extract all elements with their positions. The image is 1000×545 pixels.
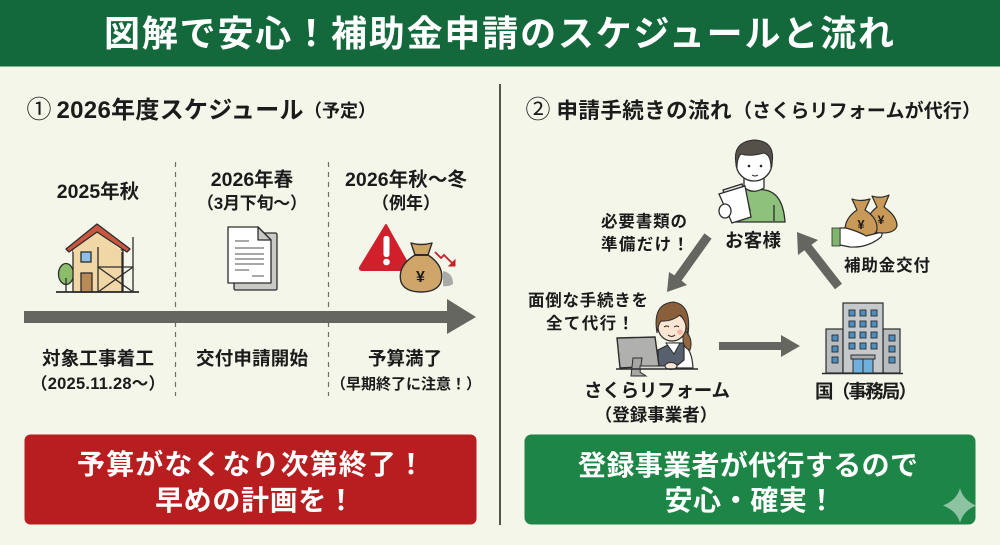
column 2: 2026 spring: 2026年春 <box>211 168 294 191</box>
column 3: 2026 autumn-winter: （例年） <box>372 193 440 213</box>
timeline arrow <box>24 299 476 334</box>
label: Sakura Reform: （登録事業者） <box>595 405 717 425</box>
arrow: customer to reform company <box>667 233 712 292</box>
column 1: 2025 autumn: 対象工事着工 <box>42 348 154 369</box>
icon: subsidy money bags in hand: ¥ <box>878 213 885 227</box>
callout: registered business handles it <box>524 434 976 524</box>
icon: government building <box>822 303 903 374</box>
icon: customer with papers <box>719 140 785 223</box>
heading: schedule: 2026年度スケジュール <box>56 97 304 124</box>
callout: budget warning <box>24 434 476 524</box>
label: just prepare documents: 準備だけ！ <box>601 234 689 254</box>
title banner <box>0 0 1000 66</box>
arrow: government to customer <box>797 232 842 289</box>
panel: 2026 schedule <box>24 96 481 524</box>
arrow: reform company to government <box>719 335 800 357</box>
column 3: 2026 autumn-winter: 予算満了 <box>368 348 442 369</box>
icon: warning and money bag: ¥ <box>416 269 425 286</box>
callout: registered business handles it: 安心・確実！ <box>664 485 836 516</box>
heading: flow <box>525 96 981 124</box>
title banner: 図解で安心！補助金申請のスケジュールと流れ <box>104 13 894 54</box>
icon: staff at computer <box>616 302 698 376</box>
callout: budget warning: 早めの計画を！ <box>155 485 355 516</box>
label: handles everything: 面倒な手続きを <box>528 290 648 310</box>
icon: document <box>228 227 277 290</box>
heading: schedule: （予定） <box>304 101 376 121</box>
label: Sakura Reform <box>584 380 730 425</box>
icon: sparkle <box>943 488 976 523</box>
column 1: 2025 autumn <box>31 180 165 393</box>
column 3: 2026 autumn-winter <box>331 168 481 393</box>
column 3: 2026 autumn-winter: （早期終了に注意！） <box>331 375 481 393</box>
divider between panels <box>499 84 501 525</box>
label: subsidy payment: 補助金交付 <box>844 255 930 275</box>
heading: flow: ② <box>525 96 551 124</box>
column 2: 2026 spring <box>196 168 308 369</box>
column 1: 2025 autumn: （2025.11.28〜） <box>31 374 165 393</box>
heading: flow: 申請手続きの流れ <box>556 99 732 123</box>
label: just prepare documents: 必要書類の <box>601 211 687 231</box>
column 3: 2026 autumn-winter: 2026年秋〜冬 <box>345 168 467 191</box>
label: handles everything <box>528 290 648 333</box>
callout: registered business handles it: 登録事業者が代行するので <box>578 449 918 481</box>
icon: warning and money bag <box>360 225 455 292</box>
label: government office: 国（事務局） <box>815 381 917 402</box>
label: handles everything: 全て代行！ <box>546 313 634 333</box>
column 2: 2026 spring: （3月下旬〜） <box>197 193 307 213</box>
heading: flow: （さくらリフォームが代行） <box>733 99 981 122</box>
icon: subsidy money bags in hand <box>832 195 897 247</box>
label: just prepare documents <box>601 211 689 254</box>
label: Sakura Reform: さくらリフォーム <box>584 380 730 401</box>
column 2: 2026 spring: 交付申請開始 <box>196 348 308 369</box>
icon: subsidy money bags in hand: ¥ <box>857 217 865 232</box>
timeline column dividers <box>176 162 328 396</box>
heading: schedule <box>26 96 376 124</box>
callout: budget warning: 予算がなくなり次第終了！ <box>77 448 425 480</box>
label: customer: お客様 <box>725 230 781 251</box>
icon: house under construction <box>56 224 139 292</box>
panel: application flow <box>524 96 981 524</box>
column 1: 2025 autumn: 2025年秋 <box>57 180 140 203</box>
heading: schedule: ① <box>26 96 52 124</box>
